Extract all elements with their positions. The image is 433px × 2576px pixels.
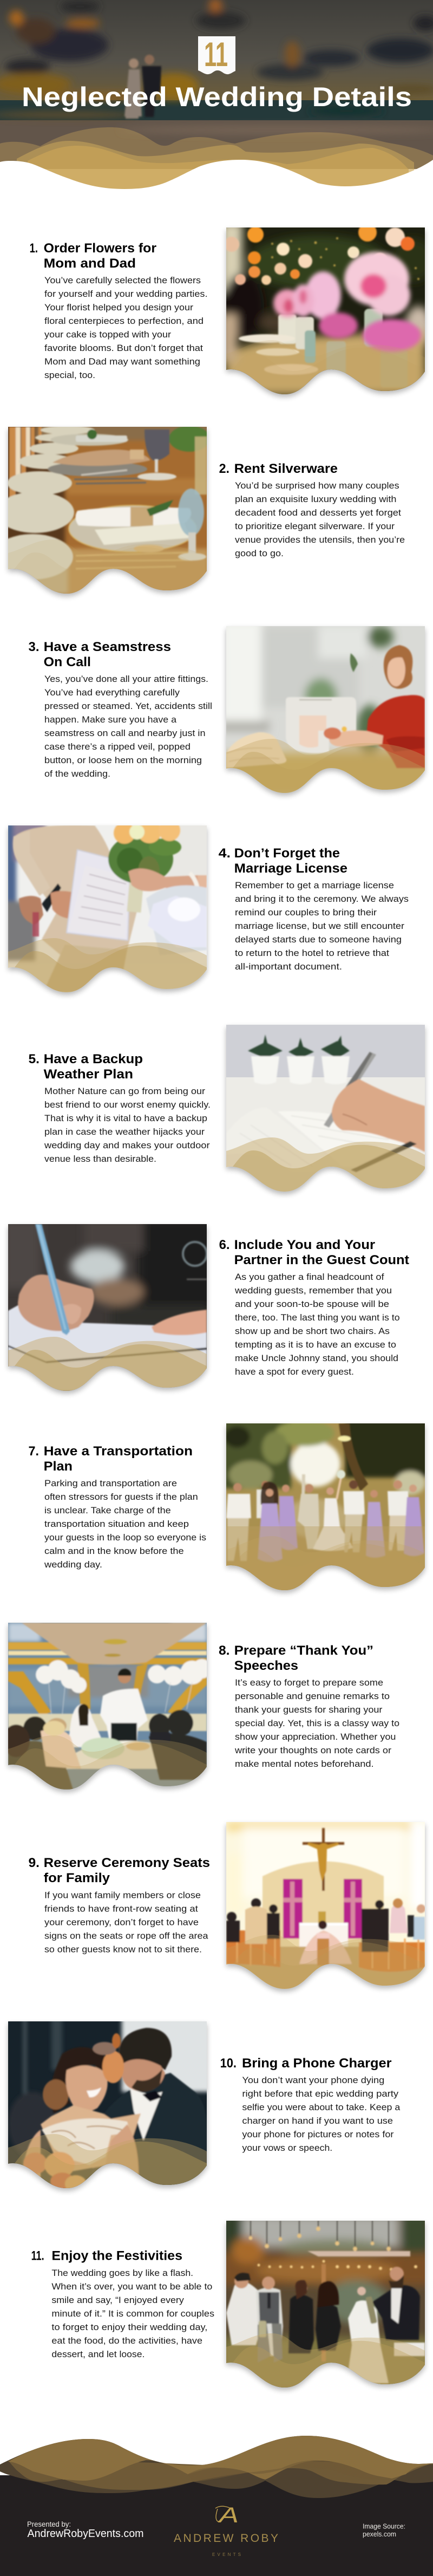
body text 2: plan an exquisite luxury wedding with [235, 495, 396, 504]
body text 1: Your florist helped you design your [44, 303, 194, 313]
panel: item 4 [5, 819, 409, 995]
decorative gold waves [0, 127, 433, 195]
body text 11: to forget to enjoy their wedding day, [51, 2323, 207, 2332]
body text 1: You’ve carefully selected the flowers [44, 276, 201, 285]
heading 9: Reserve Ceremony Seats [44, 1856, 210, 1870]
heading 6: Include You and Your [234, 1238, 375, 1252]
heading 9 [28, 1856, 210, 1885]
body text 11: minute of it.” It is common for couples [51, 2309, 214, 2319]
body text 2: to prioritize elegant silverware. If your [235, 522, 395, 531]
body text 5: plan in case the weather hijacks your [44, 1127, 205, 1137]
credit: image source: Image Source: [363, 2522, 405, 2531]
body text 8: show your appreciation. Whether you [235, 1732, 396, 1742]
heading 7: 7. [28, 1444, 39, 1459]
body text 3: of the wedding. [44, 769, 110, 779]
photo: wedding party walking outdoors [221, 1418, 432, 1594]
body text 1: favorite blooms. But don’t forget that [44, 343, 203, 353]
body text 4: remind our couples to bring their [235, 908, 377, 918]
footer background and waves [0, 2436, 433, 2576]
photo: smiling bride and groom [8, 2016, 214, 2193]
body text 7: is unclear. Take charge of the [44, 1506, 171, 1515]
hero photo: couple on a beach at sunset [0, 0, 433, 169]
heading 2: 2. [219, 461, 229, 476]
panel: item 9 [28, 1822, 427, 1992]
heading 11: Enjoy the Festivities [51, 2249, 182, 2263]
body text 6: tempting as it is to have an excuse to [235, 1340, 396, 1350]
body text 10: your vows or speech. [242, 2143, 332, 2153]
body text 9: your ceremony, don’t forget to have [44, 1917, 199, 1927]
body text 5 [44, 1087, 211, 1164]
heading 2: Rent Silverware [234, 461, 338, 476]
photo: writing in a notebook [226, 1025, 425, 1194]
heading 4 [219, 846, 347, 876]
heading 4: Marriage License [234, 861, 347, 876]
body text 3: Yes, you’ve done all your attire fittings. [44, 674, 208, 684]
body text 9: signs on the seats or rope off the area [44, 1931, 208, 1941]
body text 8: write your thoughts on note cards or [234, 1746, 392, 1755]
heading 1: 1. [30, 241, 38, 256]
body text 6: make Uncle Johnny stand, you should [235, 1354, 398, 1363]
heading 5: 5. [28, 1052, 40, 1066]
badge: number 11: 11 [204, 36, 228, 74]
body text 8: It’s easy to forget to prepare some [235, 1678, 383, 1688]
body text 4: all-important document. [235, 962, 342, 972]
heading 8: Prepare “Thank You” [234, 1643, 373, 1658]
footer [0, 2436, 433, 2576]
body text 6: As you gather a final headcount of [235, 1272, 384, 1282]
photo: table setting with silverware [0, 424, 214, 597]
body text 10: You don’t want your phone dying [242, 2076, 384, 2085]
body text 6 [234, 1272, 400, 1377]
body text 10: charger on hand if you want to use [242, 2116, 393, 2126]
body text 11: When it’s over, you want to be able to [51, 2282, 212, 2292]
title: Neglected Wedding Details [22, 82, 412, 112]
body text 7 [44, 1479, 206, 1570]
heading 3: On Call [44, 655, 91, 669]
panel: item 8 [3, 1623, 399, 1792]
body text 7: Parking and transportation are [44, 1479, 177, 1488]
photo: seamstress at sewing machine [221, 621, 432, 797]
body text 3: case there’s a ripped veil, popped [44, 742, 191, 752]
photo: outdoor party with champagne [221, 2215, 432, 2391]
panel: item 1 [30, 222, 433, 397]
credit: presented by: Presented by: [27, 2520, 71, 2528]
body text 6: wedding guests, remember that you [234, 1286, 392, 1296]
body text 1: Mom and Dad may want something [44, 357, 200, 367]
body text 8: thank your guests for sharing your [235, 1705, 383, 1715]
heading 7: Have a Transportation [44, 1444, 193, 1459]
logo: Andrew Roby Events: ANDREW ROBY [174, 2532, 278, 2545]
heading 6: 6. [219, 1238, 229, 1252]
heading 3: Have a Seamstress [44, 640, 171, 654]
body text 10: selfie you were about to take. Keep a [242, 2103, 401, 2112]
body text 3: You’ve had everything carefully [44, 688, 180, 698]
body text 3: button, or loose hem on the morning [44, 756, 202, 765]
body text 8 [234, 1678, 399, 1769]
heading 5: Weather Plan [44, 1067, 133, 1082]
heading 5 [28, 1052, 143, 1082]
body text 7: transportation situation and keep [44, 1519, 189, 1529]
heading 9: for Family [44, 1871, 110, 1885]
icon: bride [124, 58, 142, 119]
body text 4 [235, 881, 409, 972]
photo: floral centerpieces [221, 222, 433, 397]
heading 10: Bring a Phone Charger [242, 2056, 392, 2071]
icon: monogram: A [218, 2503, 239, 2527]
body text 8: make mental notes beforehand. [235, 1759, 374, 1769]
body text 9: friends to have front-row seating at [44, 1904, 198, 1914]
photo: speech on a boat reception [3, 1623, 212, 1792]
body text 3: happen. Make sure you have a [44, 715, 177, 725]
body text 3: pressed or steamed. Yet, accidents still [44, 701, 212, 711]
body text 7: wedding day. [44, 1560, 102, 1570]
body text 2: venue provides the utensils, then you’re [235, 535, 405, 545]
photo: hand writing with blue pen [3, 1219, 214, 1394]
body text 6: show up and be short two chairs. As [235, 1326, 390, 1336]
body text 2: decadent food and desserts yet forget [235, 508, 401, 518]
body text 4: marriage license, but we still encounter [235, 921, 405, 931]
body text 4: and bring it to the ceremony. We always [235, 894, 409, 904]
heading 1: Order Flowers for [44, 241, 156, 256]
heading 8 [219, 1643, 373, 1673]
heading 3: 3. [28, 640, 39, 654]
body text 4: delayed starts due to someone having [235, 935, 402, 945]
credit: image source: pexels.com [363, 2530, 396, 2538]
heading 6 [219, 1238, 409, 1267]
panel: item 5 [28, 1025, 425, 1194]
heading 10: 10. [220, 2056, 237, 2071]
body text 7: calm and in the know before the [44, 1546, 184, 1556]
credit: presented by [27, 2520, 144, 2540]
credit: presented by: AndrewRobyEvents.com [27, 2528, 144, 2540]
heading 5: Have a Backup [44, 1052, 143, 1066]
body text 9 [44, 1890, 208, 1954]
body text 4: Remember to get a marriage license [235, 881, 394, 890]
body text 6: and your soon-to-be spouse will be [235, 1299, 389, 1309]
heading 7: Plan [44, 1459, 73, 1474]
panel: item 6 [3, 1219, 409, 1394]
panel: item 7 [28, 1418, 432, 1594]
panel: item 10 [8, 2016, 401, 2193]
body text 9: so other guests know not to sit there. [44, 1944, 202, 1954]
body text 10: your phone for pictures or notes for [242, 2130, 394, 2139]
body text 2: good to go. [235, 549, 284, 558]
heading 7 [28, 1444, 193, 1474]
heading 4: 4. [219, 846, 231, 861]
body text 11: The wedding goes by like a flash. [51, 2268, 193, 2278]
body text 1 [44, 276, 208, 380]
heading 3 [28, 640, 171, 669]
logo: Andrew Roby Events [174, 2503, 278, 2557]
body text 9: If you want family members or close [44, 1890, 201, 1900]
photo: marriage license with bouquet [5, 819, 214, 995]
body text 8: personable and genuine remarks to [235, 1692, 390, 1701]
body text 4: to return to the hotel to retrieve that [235, 948, 389, 958]
body text 5: best friend to our worst enemy quickly. [44, 1100, 211, 1110]
body text 6: have a spot for every guest. [235, 1367, 354, 1377]
body text 11: dessert, and let loose. [51, 2350, 145, 2359]
heading 8: Speeches [234, 1658, 298, 1673]
heading 1: Mom and Dad [44, 256, 136, 271]
heading 4: Don’t Forget the [234, 846, 340, 861]
icon: groom [142, 55, 161, 117]
body text 11 [51, 2268, 214, 2359]
figures [226, 1470, 424, 1562]
body text 3 [44, 674, 212, 779]
body text 2: You’d be surprised how many couples [235, 481, 399, 491]
heading 9: 9. [28, 1856, 40, 1870]
heading 8: 8. [219, 1643, 229, 1658]
body text 1: special, too. [44, 370, 95, 380]
panel: item 11 [31, 2215, 432, 2391]
body text 5: That is why it is vital to have a backup [44, 1114, 207, 1123]
heading 6: Partner in the Guest Count [234, 1253, 409, 1267]
heading 11: 11. [31, 2249, 44, 2263]
heading 1 [30, 241, 156, 271]
body text 10 [242, 2076, 401, 2153]
body text 10: right before that epic wedding party [242, 2089, 399, 2099]
body text 5: venue less than desirable. [44, 1154, 156, 1164]
body text 11: eat the food, do the activities, have [51, 2336, 202, 2346]
panel: item 3 [28, 621, 432, 797]
body text 8: special day. Yet, this is a classy way to [235, 1719, 399, 1728]
body text 5: wedding day and makes your outdoor [44, 1141, 210, 1150]
body text 7: often stressors for guests if the plan [44, 1492, 198, 1502]
body text 1: for yourself and your wedding parties. [44, 289, 208, 299]
credit: image source [363, 2522, 405, 2538]
logo: Andrew Roby Events: EVENTS [212, 2552, 241, 2557]
body text 3: seamstress on call and nearby just in [44, 728, 206, 738]
body text 1: your cake is topped with your [44, 330, 172, 340]
body text 7: your guests in the loop so everyone is [44, 1533, 206, 1543]
body text 2 [235, 481, 405, 558]
body text 1: floral centerpieces to perfection, and [44, 316, 204, 326]
photo: church ceremony [226, 1822, 427, 1992]
icon: monogram [215, 2503, 239, 2527]
body text 5: Mother Nature can go from being our [44, 1087, 206, 1096]
panel: item 2 [0, 424, 405, 597]
body text 6: there, too. The last thing you want is to [235, 1313, 400, 1323]
body text 11: smile and say, “I enjoyed every [51, 2295, 185, 2305]
